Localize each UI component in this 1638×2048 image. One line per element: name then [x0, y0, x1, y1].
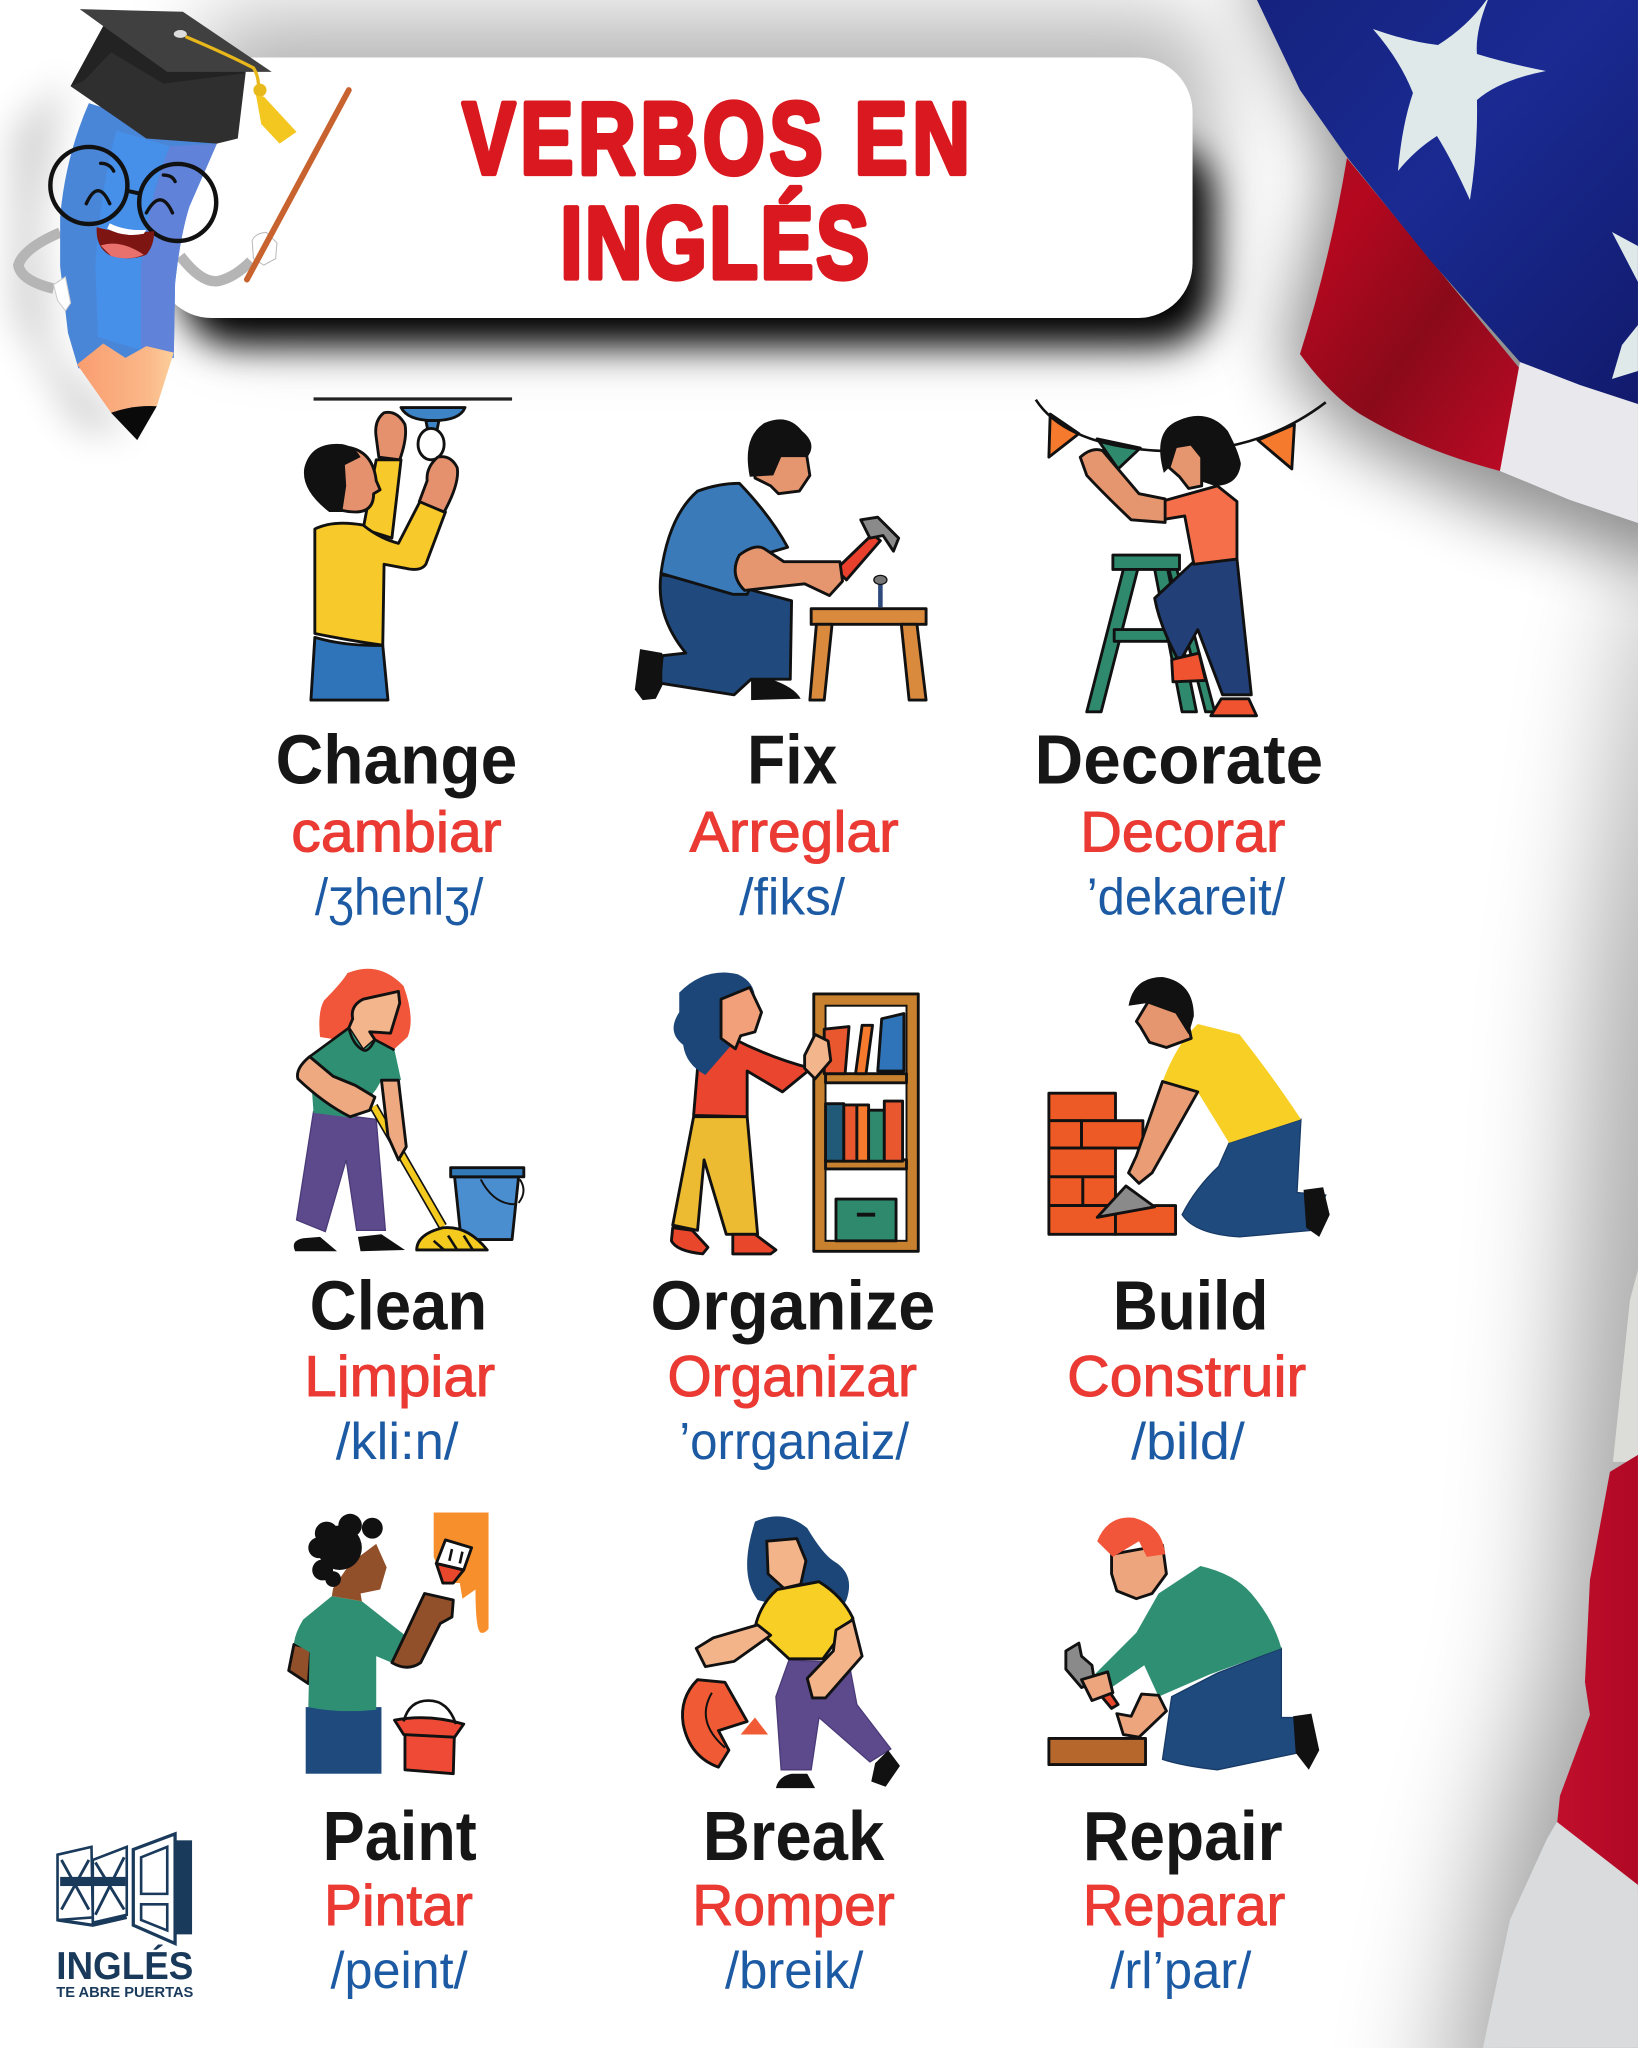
illustration: man repairing with a wrench [1049, 1517, 1319, 1770]
english word: Fix [747, 721, 837, 799]
pencil body [60, 103, 217, 368]
banner shadow [183, 13, 1215, 345]
illustration: man laying bricks [1049, 977, 1330, 1237]
translation: Arreglar [690, 801, 899, 865]
logo tagline: TE ABRE PUERTAS [56, 1984, 193, 2001]
pronunciation: ’dekareit/ [1087, 868, 1286, 926]
illustration: woman mopping with a bucket [294, 969, 524, 1251]
panel: build [1049, 977, 1330, 1471]
english word: Paint [323, 1797, 477, 1875]
logo wordmark: INGLÉS [56, 1944, 193, 1988]
pronunciation: ’orrganaiz/ [679, 1413, 910, 1471]
illustration: man hammering a nail [635, 419, 926, 700]
illustration: man changing a bulb [304, 399, 512, 700]
title: INGLÉS [560, 187, 869, 301]
panel: change [276, 399, 517, 926]
star 2 [1612, 232, 1638, 282]
pronunciation: /peint/ [331, 1942, 468, 2000]
english word: Decorate [1035, 721, 1323, 799]
illustration: woman hanging bunting on a ladder [1036, 400, 1326, 716]
translation: Pintar [324, 1874, 473, 1938]
english word: Repair [1083, 1797, 1283, 1875]
pronunciation: /kli:n/ [336, 1413, 459, 1471]
illustration: man painting a wall [289, 1512, 489, 1774]
translation: Decorar [1080, 801, 1285, 865]
pronunciation: /fiks/ [739, 868, 846, 926]
translation: Construir [1067, 1345, 1306, 1409]
pronunciation: /breik/ [725, 1942, 864, 2000]
right arm [180, 256, 251, 281]
panel: break [682, 1516, 900, 2000]
star 3 [1612, 325, 1638, 379]
graduation cap [71, 9, 297, 144]
english word: Clean [310, 1267, 487, 1345]
flag: bottom right [1483, 1270, 1638, 2048]
pronunciation: /rl’par/ [1110, 1942, 1252, 2000]
translation: Limpiar [304, 1345, 495, 1409]
english word: Build [1113, 1267, 1268, 1345]
glasses and face [50, 147, 216, 258]
translation: Organizar [667, 1345, 917, 1409]
pronunciation: /bild/ [1131, 1413, 1245, 1471]
panel: fix [635, 419, 926, 926]
mascot: blue pencil with cap [13, 9, 349, 440]
icon: open book with union flag [58, 1847, 127, 1925]
curly hair [308, 1514, 383, 1587]
flag shadow: top right [1240, 0, 1638, 560]
illustration: woman arranging a bookshelf [671, 973, 918, 1254]
icon: open door [133, 1834, 192, 1944]
pencil tip [111, 406, 157, 440]
english word: Break [703, 1797, 885, 1875]
left arm [18, 232, 60, 289]
logo: ingles te abre puertas [56, 1834, 193, 2001]
translation: Reparar [1083, 1874, 1285, 1938]
pronunciation: /ʒhenlʒ/ [315, 868, 484, 926]
mascot soft shadow [13, 78, 131, 431]
red fold [1300, 158, 1525, 471]
star 1 [1373, 0, 1546, 200]
title: VERBOS EN [462, 82, 970, 196]
panel: organize [651, 973, 935, 1471]
blue canton [1257, 0, 1638, 404]
english word: Organize [651, 1267, 935, 1345]
pencil wood [77, 344, 174, 413]
title banner [157, 57, 1193, 318]
pointer stick [247, 90, 349, 280]
panel: decorate [1035, 400, 1326, 926]
title [462, 82, 970, 301]
flag: top right [1257, 0, 1638, 523]
translation: cambiar [291, 801, 502, 865]
white stripe [1500, 362, 1638, 523]
translation: Romper [692, 1874, 895, 1938]
english word: Change [276, 721, 517, 799]
illustration: woman breaking a plate [682, 1516, 900, 1788]
panel: paint [289, 1512, 489, 2000]
panel: clean [294, 969, 524, 1471]
hands [252, 232, 277, 265]
panel: repair [1049, 1517, 1319, 2000]
flag shadow: right edge [1440, 450, 1638, 2048]
